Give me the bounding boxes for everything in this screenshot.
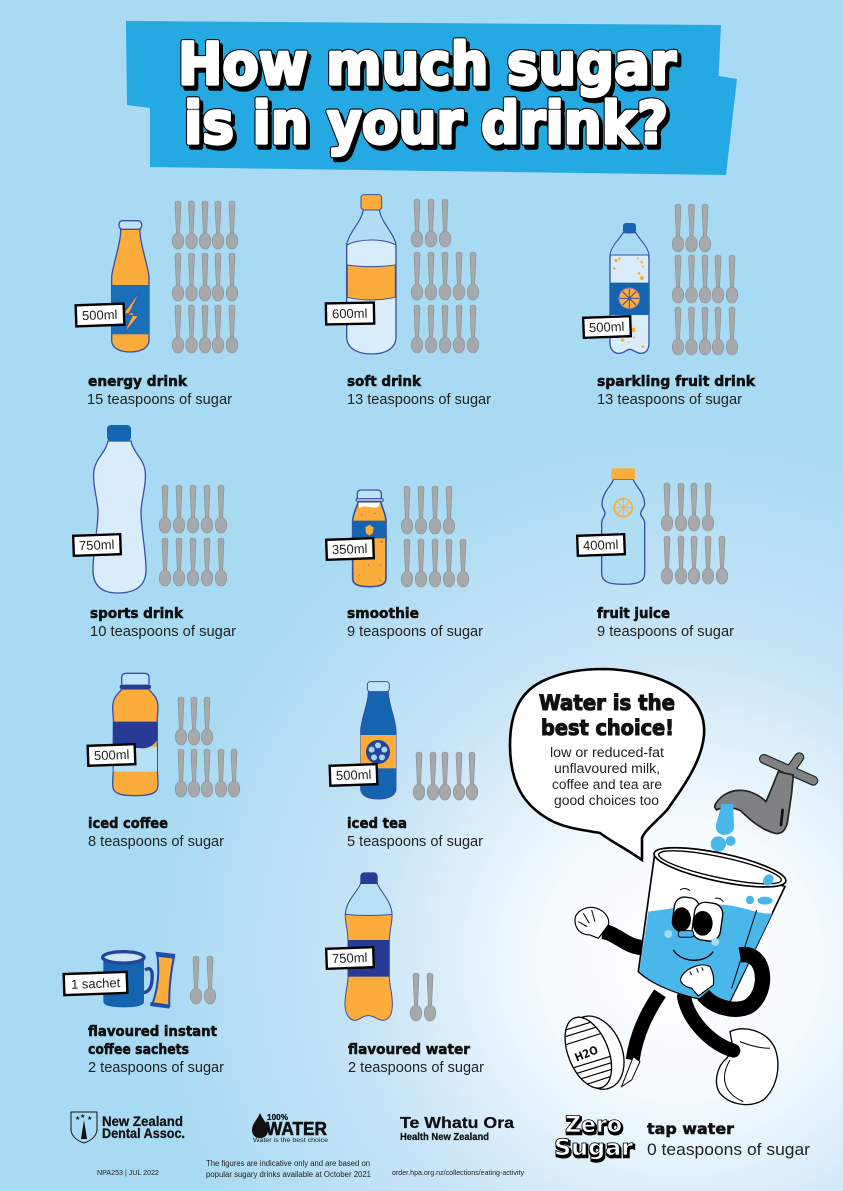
callout: speech bubble: unflavoured milk, — [554, 761, 660, 776]
text: soft drink: 13 teaspoons of sugar — [347, 391, 491, 408]
logo: Te Whatu Ora — [400, 1115, 514, 1143]
zero sugar badge — [554, 1113, 634, 1163]
panel: sports drink — [73, 425, 236, 640]
text: fruit juice — [597, 606, 734, 640]
panel: iced tea — [330, 682, 483, 850]
spoons: 13 — [411, 199, 479, 353]
text: iced tea: 5 teaspoons of sugar — [347, 833, 483, 850]
text: iced coffee — [88, 816, 224, 850]
panel: soft drink — [326, 195, 491, 408]
title banner: How much sugar — [178, 30, 676, 98]
spoons: 9 — [661, 483, 728, 584]
text: smoothie: smoothie — [347, 606, 419, 622]
volume tag — [577, 534, 625, 556]
callout: speech bubble: good choices too — [554, 793, 659, 808]
icon: energy drink bottle — [112, 221, 149, 352]
spoons: 13 — [672, 204, 738, 355]
title banner: is in your drink? — [184, 89, 668, 157]
text: iced tea: iced tea — [347, 816, 407, 832]
volume tag: 400ml — [583, 537, 619, 553]
title banner: How much sugar — [178, 30, 676, 98]
text: energy drink — [87, 374, 232, 408]
text: smoothie — [347, 606, 483, 640]
logo: Te Whatu Ora: Health New Zealand — [400, 1132, 489, 1143]
volume tag: 500ml — [94, 747, 130, 763]
spoons: 2 — [410, 973, 436, 1021]
volume tag — [64, 972, 127, 995]
text: smoothie: 9 teaspoons of sugar — [347, 623, 483, 640]
logo: New Zealand Dental Assoc: New Zealand — [102, 1114, 183, 1129]
left shoe: H2O — [573, 1042, 600, 1065]
text: energy drink: energy drink — [88, 374, 188, 390]
text: fruit juice: fruit juice — [597, 606, 670, 622]
logo: Te Whatu Ora: Te Whatu Ora — [400, 1115, 514, 1132]
logo: 100% Water: Water is the best choice — [253, 1137, 328, 1144]
icon: iced coffee bottle — [113, 673, 158, 796]
text: tap water: 0 teaspoons of sugar — [647, 1140, 810, 1159]
spoons: 5 — [413, 752, 478, 800]
mascot: running water glass — [556, 840, 789, 1105]
zero sugar badge: Sugar — [555, 1138, 634, 1163]
logo: New Zealand Dental Assoc: Dental Assoc. — [102, 1126, 185, 1141]
text: sports drink: sports drink — [90, 606, 184, 622]
icon: smoothie bottle — [353, 490, 386, 587]
spoons: 2 — [190, 956, 216, 1004]
text: flavoured instant coffee sachets: 2 teaspoons of sugar — [88, 1059, 224, 1076]
text: flavoured instant coffee sachets — [88, 1024, 224, 1076]
footer: url: order.hpa.org.nz/collections/eating-activity — [392, 1168, 524, 1177]
callout: speech bubble: low or reduced-fat — [550, 745, 664, 760]
title banner: is in your drink? — [187, 93, 671, 161]
callout: speech bubble: Water is the — [539, 691, 675, 715]
text: soft drink: soft drink — [347, 374, 422, 390]
volume tag: 350ml — [332, 541, 368, 557]
callout: speech bubble: coffee and tea are — [552, 777, 662, 792]
gloves — [575, 907, 714, 996]
text: tap water — [647, 1120, 810, 1159]
cup — [638, 840, 789, 1002]
spoons: 8 — [175, 697, 240, 797]
spoons: 9 — [401, 486, 469, 587]
text: flavoured water — [348, 1042, 484, 1076]
text: sparkling fruit drink: sparkling fruit drink — [597, 374, 756, 390]
callout: speech bubble — [510, 669, 704, 860]
volume tag — [326, 947, 374, 969]
icon: fruit juice bottle — [602, 468, 645, 584]
logo: New Zealand Dental Assoc: ★ — [75, 1115, 80, 1122]
volume tag — [330, 764, 377, 786]
arms — [602, 932, 763, 1009]
panel: energy drink — [76, 201, 238, 408]
volume tag — [326, 538, 374, 560]
legs — [633, 993, 733, 1060]
spoons: 15 — [172, 201, 238, 353]
right shoe — [717, 1029, 778, 1105]
volume tag — [76, 304, 124, 326]
text: sparkling fruit drink — [597, 374, 756, 408]
logo: New Zealand Dental Assoc — [71, 1112, 185, 1143]
text: iced tea — [347, 816, 483, 850]
volume tag — [326, 303, 374, 324]
text: iced coffee: iced coffee — [88, 816, 168, 832]
title banner: How much sugar — [181, 34, 679, 102]
text: tap water: tap water — [647, 1120, 734, 1138]
volume tag: 600ml — [332, 306, 368, 321]
title banner — [126, 21, 737, 175]
icon: tap — [711, 757, 813, 852]
panel: iced coffee — [88, 673, 240, 850]
icon: flavoured water bottle — [345, 872, 392, 1020]
text: soft drink — [347, 374, 491, 408]
text: flavoured instant coffee sachets: flavoured instant — [88, 1024, 217, 1040]
volume tag: 750ml — [332, 950, 368, 966]
text: flavoured instant coffee sachets: coffee sachets — [88, 1042, 189, 1058]
text: sports drink — [90, 606, 236, 640]
panel: smoothie — [326, 486, 483, 640]
logo: New Zealand Dental Assoc: ★ — [87, 1115, 92, 1122]
volume tag — [88, 744, 135, 766]
volume tag: 750ml — [79, 537, 115, 553]
icon: mug and sachet — [103, 952, 175, 1009]
zero sugar badge: Zero — [566, 1115, 623, 1140]
volume tag — [583, 316, 631, 338]
left shoe — [564, 1015, 641, 1090]
text: energy drink: 15 teaspoons of sugar — [87, 391, 232, 408]
water stream — [711, 804, 736, 852]
logo: 100% Water: 100% — [267, 1112, 288, 1122]
text: fruit juice: 9 teaspoons of sugar — [597, 623, 734, 640]
face — [664, 888, 724, 960]
volume tag: 500ml — [589, 319, 625, 335]
panel: flavoured water — [326, 872, 484, 1076]
spoons: 10 — [159, 485, 227, 586]
title banner: is in your drink? — [184, 89, 668, 157]
text: sparkling fruit drink: 13 teaspoons of sugar — [597, 391, 742, 408]
text: flavoured water: 2 teaspoons of sugar — [348, 1059, 484, 1076]
water drops — [746, 872, 776, 905]
panel: fruit juice — [577, 468, 734, 640]
volume tag — [73, 534, 121, 556]
panel: flavoured instant coffee sachets — [64, 952, 224, 1076]
footer: disclaimer: The figures are indicative only and are based on — [206, 1159, 370, 1168]
logo: New Zealand Dental Assoc: ★ — [80, 1113, 85, 1120]
callout: speech bubble: best choice! — [541, 716, 674, 740]
footer: disclaimer — [206, 1159, 372, 1179]
text: iced coffee: 8 teaspoons of sugar — [88, 833, 224, 850]
panel: sparkling fruit drink — [583, 204, 756, 408]
footer: code: NPA253 | JUL 2022 — [97, 1170, 159, 1177]
icon: soft drink bottle — [347, 195, 396, 354]
zero sugar badge: Zero — [565, 1113, 622, 1138]
zero sugar badge: Sugar — [554, 1136, 633, 1161]
logo: 100% Water — [252, 1112, 328, 1144]
footer: disclaimer: popular sugary drinks available at October 2021 — [206, 1170, 372, 1179]
volume tag: 500ml — [336, 767, 372, 783]
logo: 100% Water: WATER — [266, 1119, 327, 1139]
text: sports drink: 10 teaspoons of sugar — [90, 623, 236, 640]
volume tag: 1 sachet — [71, 975, 121, 992]
text: flavoured water: flavoured water — [348, 1042, 470, 1058]
icon: iced tea bottle — [361, 682, 396, 799]
volume tag: 500ml — [82, 307, 118, 323]
icon: sports drink bottle — [93, 425, 146, 593]
icon: sparkling fruit drink bottle — [610, 223, 649, 353]
